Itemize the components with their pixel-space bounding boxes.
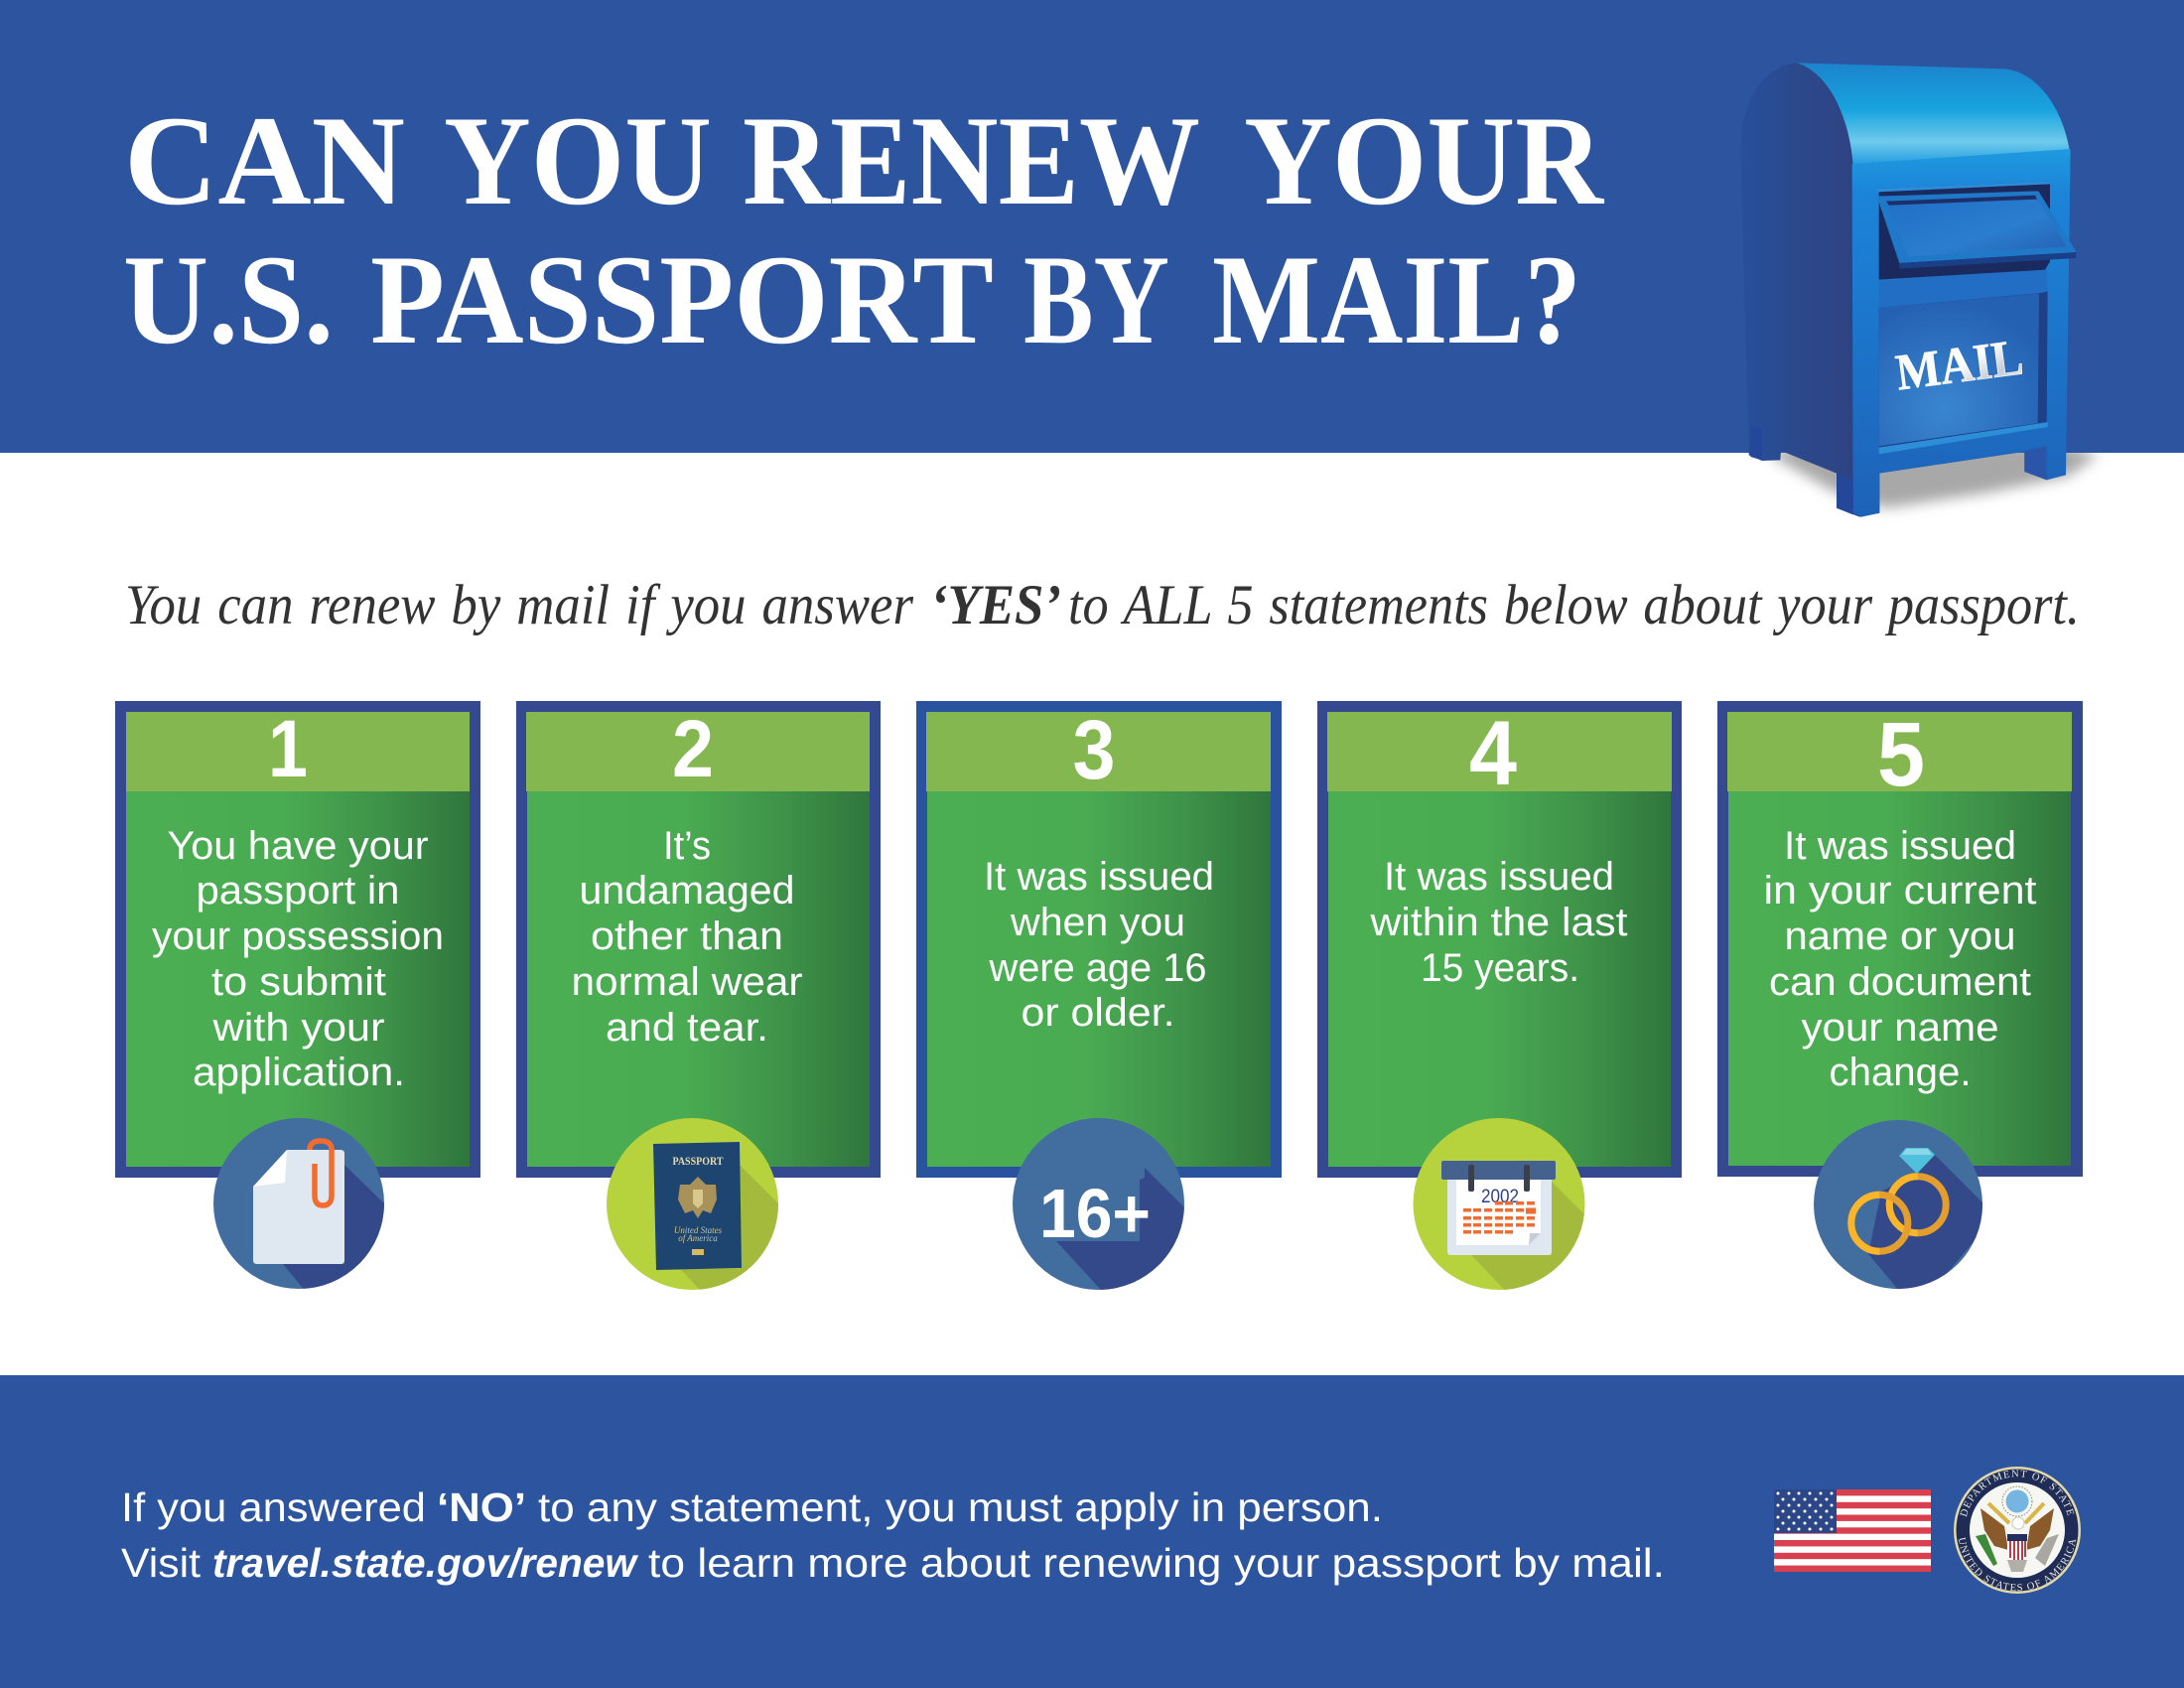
icon: U.S. flag: [1774, 1489, 1931, 1572]
panel: statement 2: [516, 701, 881, 1316]
statement 1 text: [152, 824, 444, 1094]
statement 2 text: It’s: [663, 824, 711, 868]
statement 2 text: normal wear: [572, 960, 802, 1004]
title: MAIL?: [1212, 228, 1581, 370]
statement 4 text: within the last: [1369, 901, 1628, 944]
number 4: 4: [1469, 703, 1517, 804]
footer text: to any statement, you must apply in person.: [538, 1484, 1383, 1530]
statement 2 text: and tear.: [606, 1006, 768, 1050]
icon: wedding rings: [1814, 1120, 1982, 1289]
icon: Department of State seal: UNITED STATES OF AMERICA: [1959, 1537, 2077, 1591]
title: RENEW: [743, 89, 1200, 231]
icon: passport: United States: [674, 1225, 723, 1235]
icon: Department of State seal: [1954, 1467, 2081, 1594]
intro sentence: ‘YES’: [930, 574, 1061, 636]
statement 2 text: undamaged: [580, 869, 794, 913]
footer text: Visit: [121, 1540, 202, 1586]
icon: passport: of America: [678, 1233, 718, 1243]
statement 3 text: were age 16: [989, 946, 1207, 990]
icon: calendar: 2002: [1481, 1187, 1519, 1207]
title: YOUR: [1244, 89, 1605, 231]
number 5: 5: [1877, 704, 1925, 805]
statement 4 text: 15 years.: [1421, 946, 1579, 990]
statement 5 text: change.: [1829, 1051, 1972, 1094]
statement 3 text: It was issued: [984, 855, 1214, 899]
panel: statement 5: [1717, 701, 2083, 1311]
header band: [0, 0, 2184, 453]
panel: statement 1: [115, 701, 480, 1331]
footer text: ‘NO’: [437, 1484, 526, 1530]
footer text: to learn more about renewing your passport by mail.: [648, 1540, 1665, 1586]
title: U.S.: [123, 228, 334, 370]
footer text: travel.state.gov/renew: [212, 1540, 639, 1586]
statement 2 text: other than: [591, 914, 783, 958]
title: [123, 89, 1605, 370]
statement 5 text: It was issued: [1784, 824, 2016, 868]
title: CAN: [124, 89, 405, 231]
statement 3 text: [984, 855, 1214, 1035]
footer band: [0, 1375, 2184, 1688]
statement 1 text: your possession: [152, 914, 444, 958]
footer text: [121, 1484, 1665, 1586]
intro sentence: You can renew by mail if you answer: [125, 574, 914, 636]
intro sentence: to ALL 5 statements below about your passport.: [1068, 574, 2080, 636]
footer text: If you answered: [121, 1484, 426, 1530]
icon: Department of State seal: DEPARTMENT OF STATE: [1960, 1470, 2075, 1517]
statement 5 text: in your current: [1763, 869, 2037, 913]
icon: paper with paperclip: [213, 1118, 384, 1289]
icon: blue mailbox: [1740, 63, 2098, 517]
statement 1 text: passport in: [197, 869, 399, 913]
panel: statement 3: [916, 701, 1282, 1313]
statement 4 text: [1369, 855, 1628, 990]
icon: passport: PASSPORT: [673, 1156, 724, 1168]
statement 4 text: It was issued: [1384, 855, 1614, 899]
statement 1 text: You have your: [167, 824, 429, 868]
statement 1 text: with your: [211, 1006, 385, 1050]
panel: statement 4: [1317, 701, 1682, 1326]
16+ label: 16+: [1039, 1175, 1151, 1252]
icon: 16+ badge: [1013, 1118, 1184, 1290]
statement 5 text: name or you: [1785, 914, 2015, 958]
icon: blue mailbox: MAIL: [1893, 330, 2026, 402]
title: YOU: [444, 89, 712, 231]
statement 1 text: application.: [193, 1051, 405, 1094]
statement 5 text: [1763, 824, 2037, 1094]
number 1: 1: [268, 704, 308, 794]
number 3: 3: [1072, 703, 1116, 796]
statement 5 text: can document: [1769, 960, 2031, 1004]
title: PASSPORT: [370, 228, 994, 370]
number 2: 2: [672, 704, 714, 794]
statement 3 text: or older.: [1021, 991, 1175, 1035]
intro sentence: [125, 574, 2080, 636]
icon: calendar: [1414, 1118, 1584, 1290]
statement 1 text: to submit: [211, 960, 386, 1004]
statement 2 text: [572, 824, 802, 1050]
icon: passport: [607, 1118, 778, 1290]
statement 5 text: your name: [1801, 1006, 1999, 1050]
statement 3 text: when you: [1010, 901, 1185, 944]
title: BY: [1024, 228, 1169, 370]
